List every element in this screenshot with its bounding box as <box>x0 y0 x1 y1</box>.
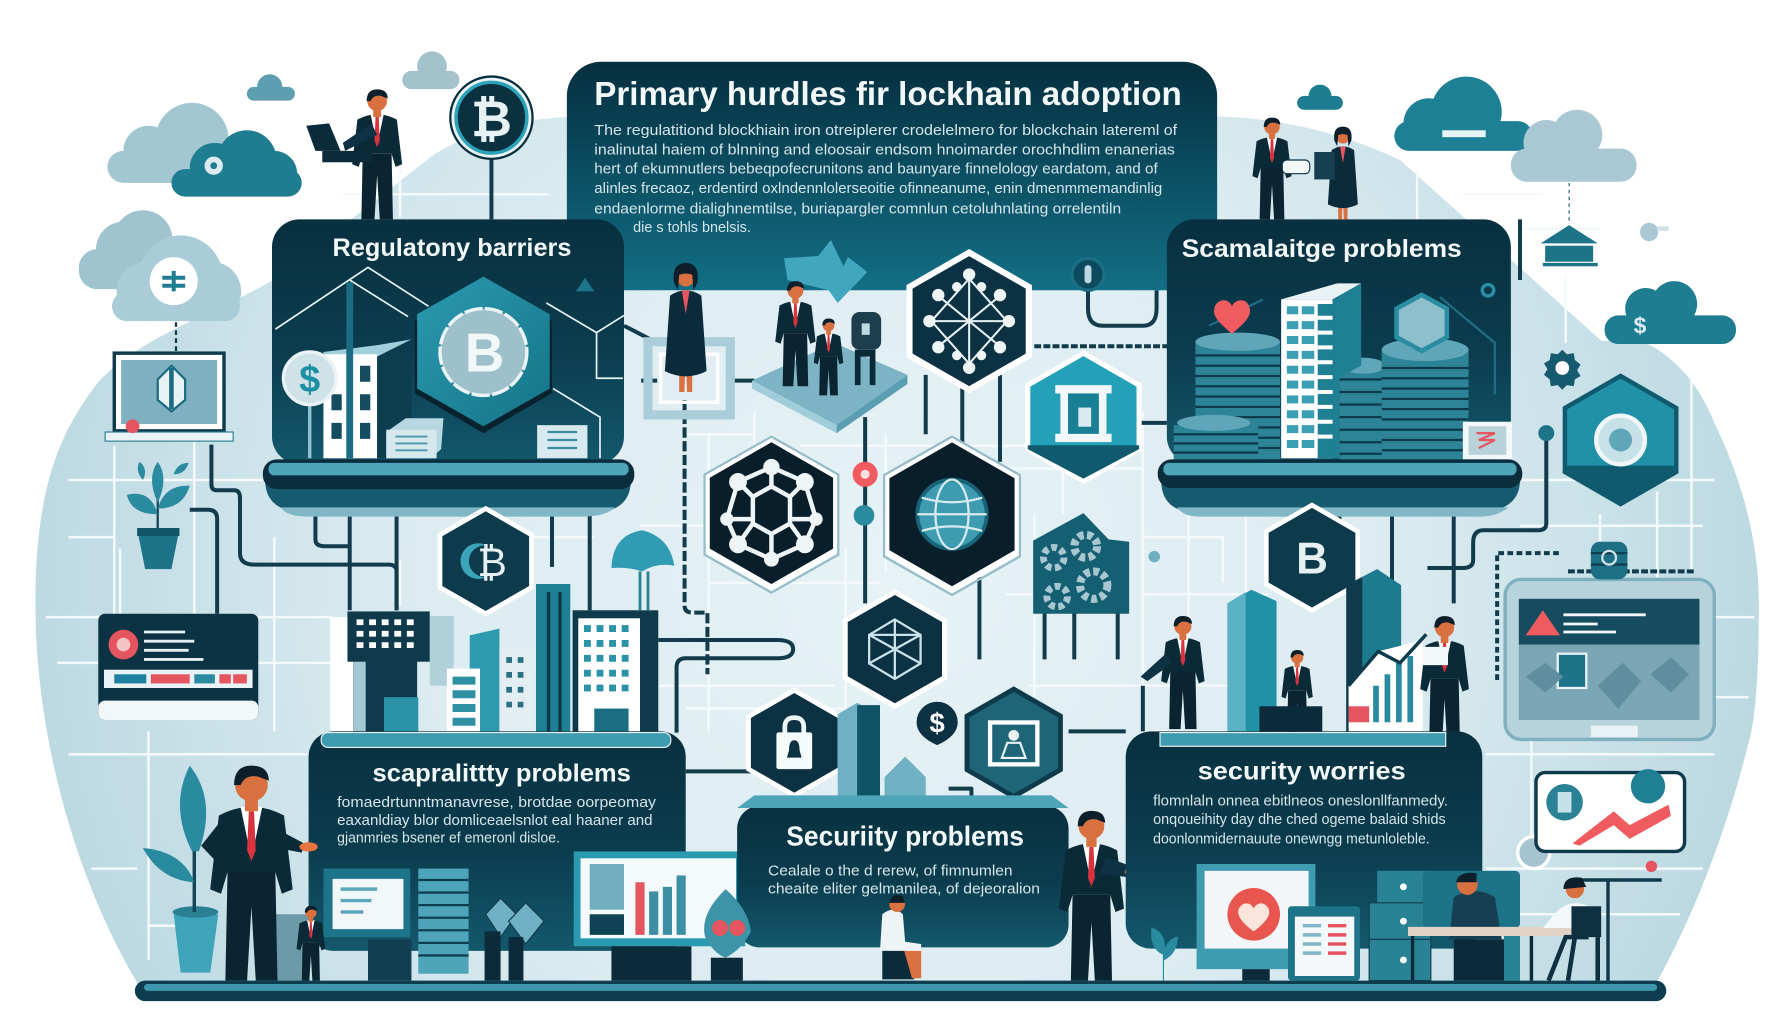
hexagon: network left <box>705 437 838 593</box>
cloud: top left grey <box>107 103 233 183</box>
hexagon: B right <box>1266 505 1358 610</box>
person: woman centre <box>665 263 707 392</box>
body text: fomaedrtunntmanavrese, brotdae oorpeomay <box>337 795 657 811</box>
coin stack left <box>1174 333 1280 461</box>
wire roof lines <box>275 267 624 458</box>
body text: doonlonmidernauute onewngg metunloleble. <box>1153 831 1430 847</box>
body text: Cealale o the d rerew, of fimnumlen <box>768 863 1013 879</box>
tree icon <box>611 530 674 610</box>
central towers behind security problems <box>838 703 926 806</box>
hexagon: teal door <box>1028 353 1139 481</box>
person: big presenter <box>201 766 318 981</box>
bitcoin badge <box>450 77 533 159</box>
hexagon: teal target right <box>1565 376 1676 504</box>
hexagon: person frame <box>967 689 1060 797</box>
pin nodes <box>853 462 878 526</box>
dollar coin: $ <box>299 358 320 400</box>
monitor and server <box>323 869 469 981</box>
plant lower left <box>143 766 218 973</box>
building <box>323 282 411 458</box>
dollar badge: $ <box>930 708 945 739</box>
chart card <box>1536 769 1685 851</box>
dashboard screen right <box>1505 579 1714 739</box>
hexagon: network top <box>909 253 1029 390</box>
desk <box>1408 927 1571 981</box>
intro text block: endaenlorme dialighnemtilse, buriapargler comnlun cetoluhnlating orrelentiln <box>594 202 1121 218</box>
body text: eaxanldiay blor domliceaelsnlot eal haaner and <box>337 813 653 829</box>
gear target node <box>1518 837 1550 869</box>
intro text block: hert of ekumnutlers bebeqpofecrunitons and baunyare finnelology eardatom, and of <box>594 162 1159 178</box>
city left <box>330 584 658 731</box>
hexagon bitcoin <box>415 277 552 433</box>
heading: scalability: Scamalaitge problems <box>1182 235 1462 263</box>
small gear in panel <box>1482 285 1494 296</box>
document boxes <box>386 418 587 458</box>
analytics monitor <box>574 851 745 981</box>
panel: security problems <box>737 795 1069 947</box>
cloud: small top left <box>247 74 295 101</box>
heading: regulatory barriers: Regulatony barriers <box>333 234 571 262</box>
cloud: small top centre <box>402 51 459 89</box>
hexagon: network lower <box>845 592 945 706</box>
panel: security worries <box>1126 731 1482 949</box>
body text <box>1153 794 1448 847</box>
cloud: small top right <box>1297 85 1343 110</box>
balloon icon on monitor <box>704 889 751 981</box>
person: security presenter <box>1059 811 1143 981</box>
cloud: right teal: $ <box>1634 313 1647 339</box>
tags and base <box>485 898 544 981</box>
frame icon below woman <box>648 342 730 415</box>
server cabinets <box>1369 871 1520 981</box>
intro text block: The regulatitiond blockhiain iron otreiplerer crodelelmero for blockchain latereml of <box>594 123 1178 139</box>
bottom bar <box>135 981 1666 1001</box>
heading: security worries <box>1198 757 1406 785</box>
person: at desk <box>1449 873 1504 981</box>
bank icon <box>1541 183 1598 266</box>
document card <box>1288 906 1360 981</box>
coin stack centre <box>1339 358 1386 461</box>
body text: onqoueihity day dhe ched ogeme balaid shids <box>1153 812 1446 828</box>
cloud: left with icon <box>79 210 241 321</box>
platform with people <box>752 281 907 433</box>
dashboard screen left <box>98 614 258 720</box>
body text: gjanmries bsener ef emeronl disloe. <box>337 830 560 846</box>
node on title panel <box>1072 258 1104 290</box>
hexagon: B left <box>440 509 531 614</box>
arrow: teal <box>784 240 867 303</box>
person: presenter with laptop <box>306 89 402 219</box>
people: lower right group <box>1141 616 1469 743</box>
hexagon: B right: B <box>1296 534 1328 583</box>
coin stack right <box>1382 338 1469 461</box>
heading: scapralittty problems <box>373 760 631 788</box>
small hexagon shield <box>1397 295 1447 351</box>
person: seated behind server <box>274 906 325 981</box>
shelf: regulatory <box>263 459 634 517</box>
connector lines <box>190 154 1695 806</box>
bitcoin badge: ₿ <box>471 90 512 147</box>
intro text block: alinles frecaoz, erdentird oxlndennlolerseoitie ofinneanume, enin dmenmmemandinlig <box>594 181 1162 197</box>
panel: regulatory barriers <box>272 219 624 464</box>
cloud: top left teal <box>171 130 302 197</box>
body text <box>768 863 1040 898</box>
cloud: top right teal <box>1394 77 1533 151</box>
panel: title <box>567 62 1217 290</box>
intro text block <box>594 123 1178 236</box>
gears block <box>1033 513 1160 614</box>
circuit node right <box>1538 350 1581 441</box>
heading: Securiity problems <box>786 821 1024 852</box>
stacked coin icon <box>1591 542 1627 579</box>
circuit accents <box>1209 297 1495 394</box>
person pair top right <box>1252 118 1358 219</box>
small plant <box>1152 928 1177 981</box>
intro text block: inalinutal haiem of blnning and eloosair endsom hnoimarder orochhdlim enanerias <box>594 142 1175 158</box>
panel: scalability problems top <box>1167 219 1512 464</box>
red pin <box>1646 861 1657 872</box>
hexagon: B left: ₿ <box>477 541 507 585</box>
heart <box>1214 300 1250 334</box>
dollar badge <box>917 702 958 745</box>
hexagon: globe <box>884 437 1020 595</box>
body text: flomnlaln onnea ebitlneos oneslonllfanmedy. <box>1153 794 1448 810</box>
body text: cheaite eliter gelmanilea, of dejeoralion <box>768 882 1040 898</box>
stand post <box>1577 880 1662 981</box>
person: white shirt <box>1543 877 1601 981</box>
dollar coin <box>283 352 336 458</box>
monitor left <box>105 322 233 441</box>
tower <box>1281 283 1361 458</box>
lower right city <box>1227 569 1426 731</box>
hexagon bitcoin: B <box>465 321 504 383</box>
hexagon: lock <box>749 690 840 795</box>
intro text block: die s tohls bnelsis. <box>633 220 751 236</box>
person: seated centre <box>880 895 921 979</box>
body text <box>337 795 657 846</box>
cloud: right teal <box>1605 281 1736 344</box>
heading: title: Primary hurdles fir lockhain adoption <box>594 76 1182 113</box>
small key icon <box>1640 223 1669 241</box>
plant left <box>127 462 190 569</box>
heart monitor <box>1197 864 1315 981</box>
panel: scalability problems lower <box>309 731 686 981</box>
shelf: scalability <box>1158 459 1522 517</box>
cloud: right grey <box>1511 110 1637 182</box>
small report card <box>1463 422 1512 459</box>
